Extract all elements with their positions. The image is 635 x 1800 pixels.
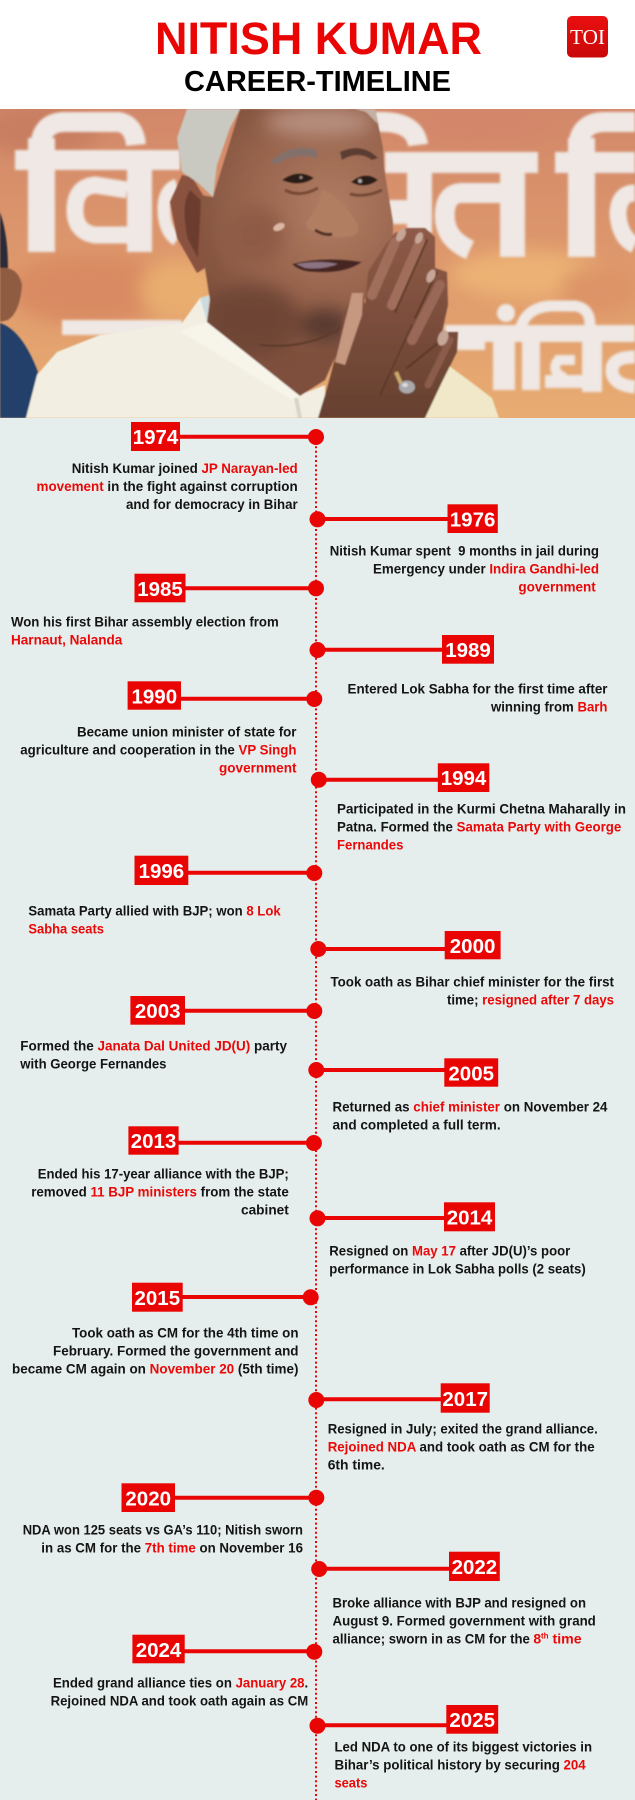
event: 2020 — [23, 1483, 324, 1555]
description: Samata Party allied with BJP; won 8 Lok — [28, 902, 281, 918]
description: with George Fernandes — [19, 1055, 167, 1071]
year badge: 2003 — [135, 1000, 181, 1023]
year badge: 2020 — [125, 1487, 171, 1510]
banner lettering (blurred) — [15, 122, 635, 392]
description: Became union minister of state for — [77, 723, 297, 739]
cheek highlight — [272, 222, 286, 232]
description — [51, 1674, 308, 1708]
description: February. Formed the government and — [53, 1342, 298, 1358]
year badge: 1990 — [131, 686, 177, 708]
description: Nitish Kumar spent 9 months in jail during — [330, 542, 599, 558]
description — [330, 973, 614, 1007]
description — [332, 1098, 608, 1132]
description — [23, 1521, 303, 1555]
year badge: 1985 — [137, 578, 183, 601]
description — [334, 1738, 592, 1790]
description: Returned as chief minister on November 24 — [332, 1098, 608, 1114]
event: 1994 — [311, 763, 626, 852]
description: August 9. Formed government with grand — [332, 1612, 596, 1628]
event: 2025 — [310, 1705, 592, 1790]
year badge — [122, 1483, 175, 1512]
description: Took oath as Bihar chief minister for the first — [330, 973, 614, 989]
description: Resigned on May 17 after JD(U)’s poor — [329, 1242, 571, 1258]
event: 1974 — [36, 422, 324, 512]
timeline axis — [315, 437, 317, 1800]
description: NDA won 125 seats vs GA’s 110; Nitish sworn — [23, 1521, 303, 1537]
ring — [396, 372, 415, 394]
description: Sabha seats — [28, 920, 104, 936]
event: 2000 — [310, 931, 614, 1007]
description: performance in Lok Sabha polls (2 seats) — [329, 1260, 586, 1276]
description: and completed a full term. — [332, 1116, 501, 1132]
year badge — [444, 1058, 498, 1087]
description: Won his first Bihar assembly election from — [11, 613, 279, 629]
event: 1996 — [28, 856, 322, 936]
year badge: 2022 — [452, 1556, 497, 1579]
description: government — [219, 760, 297, 776]
year badge: 2014 — [447, 1206, 493, 1230]
description — [337, 800, 626, 852]
year badge: 2005 — [448, 1062, 494, 1086]
nose — [307, 218, 358, 236]
description — [11, 613, 279, 647]
event: 2005 — [308, 1058, 608, 1132]
event: 1990 — [20, 681, 322, 776]
description: Bihar’s political history by securing 204 — [334, 1756, 586, 1772]
description — [329, 1242, 586, 1276]
description: government — [518, 578, 596, 594]
description — [31, 1165, 289, 1217]
description — [19, 1037, 287, 1071]
year badge — [134, 856, 188, 885]
description: Entered Lok Sabha for the first time after — [348, 680, 608, 696]
description: Rejoined NDA and took oath as CM for the — [328, 1438, 595, 1454]
eyebrows — [270, 148, 317, 165]
hands — [318, 228, 458, 418]
description: Harnaut, Nalanda — [11, 631, 123, 647]
year badge: 2000 — [450, 935, 495, 958]
description: Ended his 17-year alliance with the BJP; — [38, 1165, 289, 1181]
event: 2022 — [311, 1552, 596, 1646]
event: 2013 — [31, 1126, 322, 1217]
description: agriculture and cooperation in the VP Singh — [20, 741, 297, 757]
description — [28, 902, 281, 936]
description: Resigned in July; exited the grand alliance. — [328, 1420, 598, 1436]
head and neck — [200, 109, 393, 396]
subtitle: CAREER-TIMELINE — [184, 66, 451, 98]
description: Emergency under Indira Gandhi-led — [373, 560, 599, 576]
description: Led NDA to one of its biggest victories in — [334, 1738, 592, 1754]
description — [20, 723, 297, 776]
year badge: 1989 — [445, 639, 491, 662]
event: 1989 — [310, 635, 608, 715]
event: 1985 — [11, 574, 324, 647]
header — [155, 13, 608, 98]
description: Ended grand alliance ties on January 28. — [53, 1674, 308, 1690]
description: Took oath as CM for the 4th time on — [72, 1324, 298, 1340]
description: Patna. Formed the Samata Party with George — [337, 818, 621, 834]
icon: TOI logo: TOI — [570, 25, 605, 49]
description: removed 11 BJP ministers from the state — [31, 1183, 289, 1199]
description: winning from Barh — [490, 699, 608, 715]
year badge: 1994 — [441, 767, 487, 790]
year badge: 1996 — [139, 860, 184, 883]
description — [332, 1594, 596, 1646]
description: became CM again on November 20 (5th time) — [12, 1360, 298, 1376]
description: Nitish Kumar joined JP Narayan-led — [72, 460, 298, 476]
event: 2024 — [51, 1635, 322, 1708]
description: Formed the Janata Dal United JD(U) party — [20, 1037, 287, 1053]
description — [36, 460, 298, 512]
description — [330, 542, 599, 594]
shirt — [26, 295, 325, 418]
description — [348, 680, 608, 715]
year badge: 1974 — [133, 426, 179, 449]
event: 1976 — [310, 504, 599, 594]
year badge — [445, 931, 501, 959]
year badge: 2024 — [136, 1639, 182, 1662]
event: 2015 — [12, 1283, 319, 1376]
title: NITISH KUMAR — [155, 13, 482, 64]
event: 2014 — [310, 1202, 586, 1276]
description — [328, 1420, 598, 1472]
eyes — [282, 173, 314, 184]
year badge: 2013 — [131, 1130, 176, 1153]
event: 2017 — [308, 1383, 598, 1472]
description: cabinet — [241, 1201, 289, 1217]
year badge — [128, 681, 181, 710]
year badge: 2025 — [449, 1709, 495, 1732]
description — [12, 1324, 298, 1376]
description: Rejoined NDA and took oath again as CM — [51, 1692, 308, 1708]
year badge: 2015 — [134, 1287, 180, 1310]
description: Broke alliance with BJP and resigned on — [332, 1594, 586, 1610]
description: th — [541, 1632, 549, 1640]
description: and for democracy in Bihar — [126, 496, 298, 512]
description: in as CM for the 7th time on November 16 — [41, 1539, 303, 1555]
year badge: 1976 — [450, 508, 495, 532]
description: seats — [334, 1774, 368, 1790]
description: 8 — [533, 1630, 541, 1646]
description: time; resigned after 7 days — [447, 991, 614, 1007]
icon: TOI logo — [567, 16, 608, 58]
photo: Nitish Kumar with folded hands — [0, 105, 635, 418]
description: time — [552, 1630, 582, 1646]
description: 6th time. — [328, 1456, 385, 1472]
description: Fernandes — [337, 836, 404, 852]
event: 2003 — [19, 996, 322, 1071]
year badge: 2017 — [442, 1388, 488, 1411]
hair — [177, 109, 240, 197]
background person — [0, 212, 38, 418]
ear — [170, 175, 205, 273]
description: movement in the fight against corruption — [36, 478, 298, 494]
year badge — [130, 996, 185, 1025]
description: Participated in the Kurmi Chetna Maharally in — [337, 800, 626, 816]
mouth — [292, 259, 362, 272]
description: alliance; sworn in as CM for the — [332, 1630, 530, 1646]
